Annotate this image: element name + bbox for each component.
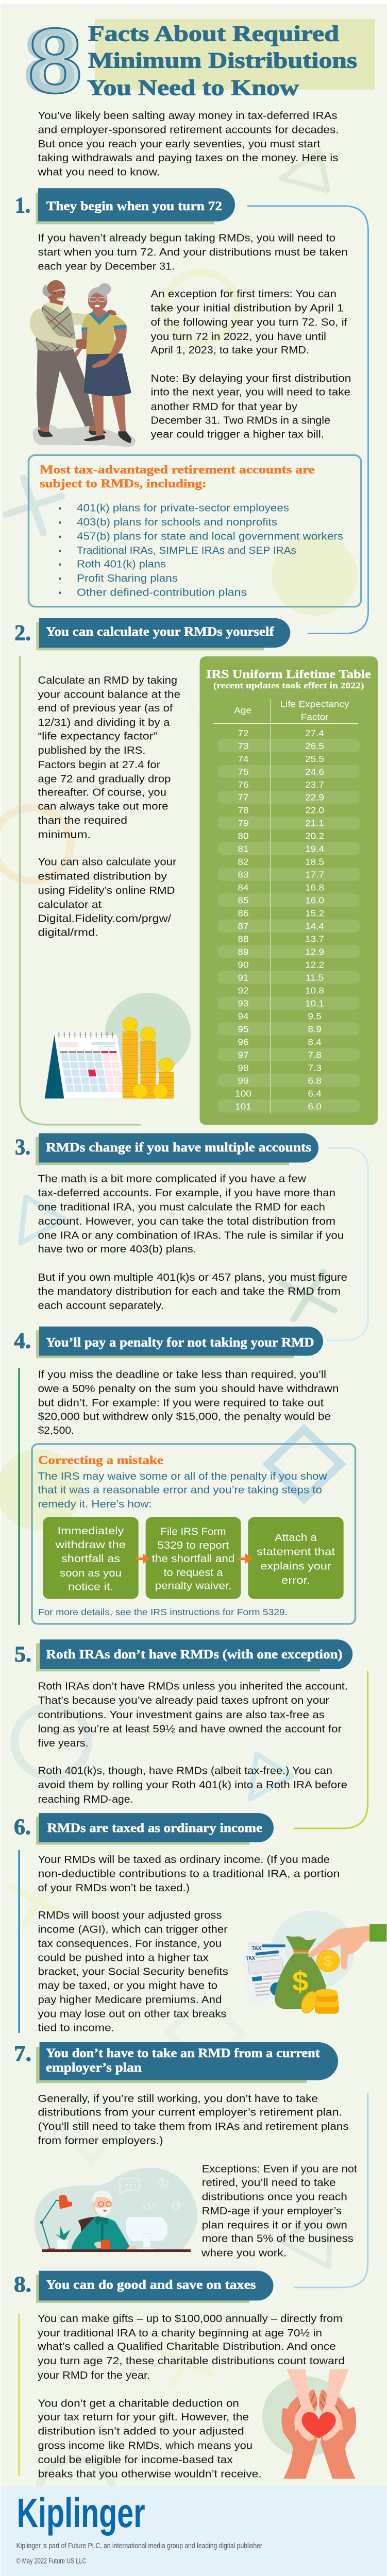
section 4 text: owe a 50% penalty on the sum you should have withdrawn — [38, 1383, 339, 1395]
section 3 text: the mandatory distribution for each and take the RMD from — [38, 1286, 341, 1297]
section 2 text: “life expectancy factor” — [38, 731, 157, 742]
exception text: take your initial distribution by April 1 — [150, 302, 344, 314]
illustration: money bag, tax forms and coins — [242, 1910, 386, 2015]
section 5 text: long as you’re at least 59½ and have owned the account for — [38, 1723, 342, 1735]
table rows: 91 — [238, 972, 249, 982]
table rows: 7.3 — [308, 1062, 322, 1073]
illustration: calendar and coins — [45, 993, 191, 1098]
table rows: 27.4 — [305, 727, 324, 738]
table rows: 15.2 — [305, 908, 324, 918]
table rows: 12.2 — [305, 959, 324, 970]
account list: 457(b) plans for state and local government workers — [77, 531, 343, 542]
table rows: 22.9 — [305, 792, 324, 803]
table rows: 12.9 — [305, 946, 324, 957]
exception text: into the next year, you will need to take — [150, 386, 350, 398]
section 2 text: You can also calculate your — [38, 856, 177, 868]
table rows: 81 — [238, 843, 249, 854]
exception text: December 31. Two RMDs in a single — [150, 415, 330, 426]
footer — [1, 2486, 387, 2576]
exception text: you turn 72 in 2022, you have until — [150, 331, 326, 343]
table rows: 100 — [235, 1088, 251, 1098]
section 5 text: Roth 401(k)s, though, have RMDs (albeit tax-free.) You can — [38, 1765, 332, 1776]
table rows: 18.5 — [305, 856, 324, 867]
section 8 text: distribution isn’t added to your adjusted — [38, 2426, 244, 2437]
title: You Need to Know — [87, 75, 299, 100]
section 6 text: RMDs will boost your adjusted gross — [38, 1910, 222, 1921]
exceptions text: Exceptions: Even if you are not — [202, 2163, 357, 2175]
heading 3: 3. — [15, 1134, 30, 1159]
intro text: and employer-sponsored retirement accounts for decades. — [38, 124, 339, 135]
section 5 text — [38, 1681, 348, 1805]
exception text: of the following year you turn 72. So, if — [150, 317, 347, 328]
section 8 text — [37, 2313, 345, 2480]
section 8 text: gross income like RMDs, which means you — [38, 2440, 253, 2451]
section 2 text: calculator at — [38, 899, 102, 910]
section 4 text: $2,500. — [38, 1425, 74, 1436]
section 7 text — [38, 2093, 349, 2146]
table rows: 96 — [238, 1037, 249, 1047]
title: Facts About Required — [88, 21, 339, 46]
section 2 text: end of previous year (as of — [38, 703, 173, 714]
section 2 text: Digital.Fidelity.com/prgw/ — [38, 913, 171, 924]
section 5 text: contributions. Your investment gains are also tax-free as — [38, 1709, 325, 1721]
illustration: older couple — [29, 280, 136, 447]
table rows: 84 — [238, 882, 249, 893]
table rows: 97 — [238, 1049, 249, 1060]
illustration: money bag, tax forms and coins: $ — [324, 1954, 332, 1970]
section 3 text: But if you own multiple 401(k)s or 457 plans, you must figure — [38, 1272, 347, 1283]
exceptions text: more than 5% of the business — [202, 2233, 354, 2244]
step 3: statement that — [257, 1546, 335, 1557]
illustration: money bag, tax forms and coins: $ — [292, 1965, 308, 1997]
section 7 text: distributions from your current employer’s retirement plan. — [38, 2107, 342, 2118]
exception text: April 1, 2023, to take your RMD. — [150, 345, 309, 356]
table rows: 73 — [238, 740, 249, 751]
section 8 text: you turn age 72, these charitable distributions count toward — [38, 2355, 345, 2367]
section 2 text: minimum. — [38, 829, 91, 840]
section 2 text: thereafter. Of course, you — [38, 787, 166, 798]
heading 6: RMDs are taxed as ordinary income — [47, 1821, 262, 1835]
step 3: error. — [281, 1574, 310, 1586]
intro text — [37, 110, 339, 178]
mistake intro text: remedy it. Here’s how: — [38, 1498, 152, 1510]
publisher line: Kiplinger is part of Future PLC, an international media group and leading digital publisher — [16, 2541, 262, 2550]
table rows: 6.8 — [308, 1075, 322, 1086]
step 1: notice it. — [68, 1581, 113, 1593]
section 6 text: bracket, your Social Security benefits — [38, 1966, 228, 1977]
section 8 text: your traditional IRA to a charity beginning at age 70½ in — [38, 2328, 322, 2339]
exceptions text: RMD-age if your employer’s — [202, 2205, 342, 2217]
arrow: step 1 to step 2 — [135, 1553, 150, 1564]
step 2: penalty waiver. — [155, 1580, 231, 1591]
exceptions text: retired, you’ll need to take — [202, 2177, 336, 2189]
step 2: 5329 to report — [157, 1539, 229, 1551]
section 8 text: your tax return for your gift. However, the — [38, 2412, 249, 2423]
section 1 text: start when you turn 72. And your distributions must be taken — [38, 246, 348, 258]
section 8 text: You don’t get a charitable deduction on — [38, 2398, 239, 2410]
section 2 text: digital/rmd. — [38, 927, 98, 938]
numeral 8: 8 — [23, 9, 77, 113]
title: Minimum Distributions — [88, 48, 357, 73]
heading 7 — [14, 2041, 338, 2083]
table rows: 17.7 — [305, 869, 324, 880]
table rows — [235, 727, 324, 1111]
table rows: 78 — [238, 805, 249, 816]
heading 6 — [14, 1813, 274, 1845]
section 8 text: You can make gifts – up to $100,000 annually – directly from — [38, 2313, 343, 2325]
section 6 text: tax consequences. For instance, you — [38, 1938, 222, 1950]
section 6 text: could be pushed into a higher tax — [38, 1952, 209, 1963]
intro text: what you need to know. — [37, 166, 160, 178]
section 2 text: Calculate an RMD by taking — [38, 675, 177, 686]
table rows: 89 — [238, 946, 249, 957]
panel: correcting a mistake: Correcting a mistake — [38, 1453, 163, 1467]
heading 7: employer’s plan — [46, 2060, 142, 2075]
section 5 text: avoid them by rolling your Roth 401(k) into a Roth IRA before — [38, 1779, 347, 1791]
panel: IRS uniform lifetime table: IRS Uniform Lifetime Table — [206, 668, 371, 681]
step 1: shortfall as — [61, 1553, 120, 1565]
section 5 text: That’s because you’ve already paid taxes upfront on your — [38, 1695, 329, 1706]
step 1: withdraw the — [55, 1539, 126, 1551]
step 2: to request a — [163, 1567, 223, 1579]
exceptions text: plan requires it or if you own — [202, 2219, 347, 2231]
account list: Other defined-contribution plans — [77, 587, 247, 598]
table rows: 20.2 — [305, 831, 324, 841]
section 1 text — [38, 232, 348, 272]
section 3 text: The math is a bit more complicated if you have a few — [38, 1173, 306, 1185]
table rows: 8.4 — [308, 1037, 322, 1047]
table rows: 98 — [238, 1062, 249, 1073]
account list: 403(b) plans for schools and nonprofits — [77, 517, 277, 528]
exceptions text: where you work. — [201, 2247, 287, 2259]
section 3 text: tax-deferred accounts. For example, if you have more than — [38, 1188, 335, 1199]
step 2: File IRS Form — [161, 1526, 226, 1538]
heading 1 — [15, 188, 235, 224]
Kiplinger logo: Kiplinger — [17, 2490, 145, 2536]
numeral 8: 8 — [28, 9, 82, 113]
table rows: 16.0 — [305, 895, 324, 905]
exception text — [150, 289, 351, 440]
panel: account types — [29, 455, 361, 607]
table rows: 10.1 — [305, 998, 324, 1008]
illustration: older man at desk — [35, 2168, 197, 2252]
heading 6: 6. — [14, 1814, 31, 1839]
section 8 text: breaks that you otherwise wouldn’t receive. — [38, 2468, 262, 2480]
section 4 text: If you miss the deadline or take less than required, you’ll — [38, 1369, 326, 1380]
section 6 text: non-deductible contributions to a traditional IRA, a portion — [38, 1868, 340, 1879]
section 6 text: you may lose out on other tax breaks — [38, 2008, 227, 2020]
heading 1: 1. — [15, 193, 30, 217]
panel: correcting a mistake — [32, 1444, 356, 1624]
table header: Factor — [301, 711, 329, 722]
table header — [234, 699, 349, 722]
intro text: taking withdrawals and paying taxes on the money. Here is — [38, 152, 338, 164]
section 4 text: $20,000 but withdrew only $15,000, the penalty would be — [38, 1411, 331, 1422]
heading 7: 7. — [14, 2041, 31, 2066]
table rows: 21.1 — [305, 818, 324, 828]
heading 4 — [14, 1327, 323, 1358]
mistake intro text: that it was a reasonable error and you’re taking steps to — [38, 1484, 322, 1496]
table rows: 93 — [238, 998, 249, 1008]
table rows: 95 — [238, 1024, 249, 1034]
table rows: 19.4 — [305, 843, 324, 854]
arrow: step 2 to step 3 — [238, 1553, 253, 1564]
section 2 text: using Fidelity’s online RMD — [38, 885, 175, 896]
table rows: 8.9 — [308, 1024, 322, 1034]
section 3 text: one IRA or any combination of IRAs. The rule is similar if you — [38, 1230, 344, 1241]
table rows: 88 — [238, 934, 249, 944]
heading 5: 5. — [14, 1641, 31, 1667]
section 2 text: your account balance at the — [38, 689, 180, 701]
section 8 text: could be eligible for income-based tax — [38, 2454, 233, 2466]
table rows: 82 — [238, 856, 249, 867]
table rows: 7.8 — [308, 1049, 322, 1060]
section 3 text: have two or more 403(b) plans. — [38, 1243, 196, 1255]
table header: Life Expectancy — [280, 699, 349, 709]
table rows: 25.5 — [305, 753, 324, 764]
account list: 401(k) plans for private-sector employees — [77, 502, 289, 514]
table rows: 90 — [238, 959, 249, 970]
heading 4: You’ll pay a penalty for not taking your RMD — [46, 1335, 314, 1349]
panel: IRS uniform lifetime table: (recent updates took effect in 2022) — [213, 681, 364, 690]
table rows: 77 — [238, 792, 249, 803]
section 2 text: than the required — [38, 815, 127, 826]
account list — [59, 502, 343, 598]
section 5 text: reaching RMD-age. — [38, 1793, 133, 1805]
table stripes — [217, 739, 360, 1112]
section 8 text: your RMD for the year. — [38, 2369, 150, 2381]
table rows: 24.6 — [305, 766, 324, 777]
table rows: 23.7 — [305, 779, 324, 790]
heading 5: Roth IRAs don’t have RMDs (with one exception) — [46, 1647, 343, 1662]
intro text: But once you reach your early seventies, you must start — [38, 138, 321, 150]
section 3 text: one traditional IRA, you must calculate the RMD for each — [38, 1201, 325, 1213]
section 7 text: Generally, if you’re still working, you don’t have to take — [38, 2093, 318, 2105]
table rows: 87 — [238, 921, 249, 931]
section 6 text: may be taxed, or you might have to — [38, 1980, 217, 1992]
table rows: 72 — [238, 727, 249, 738]
table rows: 83 — [238, 869, 249, 880]
section 1 text: each year by December 31. — [38, 261, 175, 272]
section 2 text: estimated distribution by — [38, 871, 167, 882]
section 5 text: Roth IRAs don’t have RMDs unless you inherited the account. — [38, 1681, 348, 1692]
section 6 text: pay higher Medicare premiums. And — [38, 1994, 222, 2006]
panel: IRS uniform lifetime table — [200, 656, 378, 1125]
section 7 text: (You’ll still need to take them from IRAs and retirement plans — [38, 2121, 349, 2132]
heading 3 — [15, 1133, 318, 1165]
table rows: 94 — [238, 1011, 249, 1021]
heading 4: 4. — [14, 1328, 31, 1353]
section 2 text: age 72 and gradually drop — [38, 773, 171, 785]
section 6 text — [38, 1854, 340, 2033]
copyright: © May 2022 Future US LLC — [16, 2557, 87, 2565]
table rows: 6.0 — [308, 1101, 322, 1111]
table rows: 92 — [238, 985, 249, 995]
table rows: 99 — [238, 1075, 249, 1086]
step 2: the shortfall and — [152, 1553, 234, 1565]
illustration: money bag, tax forms and coins: TAX — [245, 1955, 256, 1962]
section 7 text: from former employers.) — [38, 2135, 163, 2146]
heading 2: 2. — [14, 620, 31, 645]
section 5 text: five years. — [38, 1738, 88, 1749]
section 2 text: 12/31) and dividing it by a — [38, 717, 170, 728]
step 2 — [146, 1517, 241, 1599]
heading 8: 8. — [14, 2272, 31, 2297]
account list: Profit Sharing plans — [77, 572, 178, 584]
table rows: 11.5 — [306, 972, 324, 982]
mistake intro text: The IRS may waive some or all of the penalty if you show — [38, 1470, 327, 1482]
heading 3: RMDs change if you have multiple accounts — [46, 1140, 311, 1155]
heading 2 — [14, 618, 290, 650]
table rows: 75 — [238, 766, 249, 777]
exceptions text: distributions once you reach — [202, 2191, 347, 2202]
step 3: explains your — [260, 1561, 331, 1572]
exception text: An exception for first timers: You can — [150, 289, 336, 300]
heading 8 — [14, 2271, 273, 2303]
section 4 text: but didn’t. For example: If you were required to take out — [38, 1397, 324, 1409]
exception text: another RMD for that year by — [150, 401, 298, 413]
title — [23, 9, 357, 113]
table rows: 74 — [238, 753, 249, 764]
table rows: 6.4 — [308, 1088, 322, 1098]
table header: Age — [234, 705, 251, 715]
section 2 text: published by the IRS. — [38, 744, 145, 756]
section 3 text — [38, 1173, 347, 1312]
table rows: 10.8 — [305, 985, 324, 995]
table rows: 26.5 — [305, 740, 324, 751]
section 2 text — [38, 675, 180, 938]
table rows: 14.4 — [305, 921, 324, 931]
step 1 — [43, 1517, 139, 1599]
panel: account types: Most tax-advantaged retirement accounts are — [40, 463, 315, 477]
table rows: 80 — [238, 831, 249, 841]
section 6 text: of your RMDs won’t be taxed.) — [38, 1883, 190, 1894]
exception text: Note: By delaying your first distribution — [150, 372, 351, 384]
table rows: 76 — [238, 779, 249, 790]
section 3 text: account. However, you can take the total distribution from — [38, 1215, 335, 1227]
section 1 text: If you haven’t already begun taking RMDs, you will need to — [38, 232, 335, 244]
intro text: You’ve likely been salting away money in tax-deferred IRAs — [38, 110, 337, 122]
mistake intro text — [38, 1470, 327, 1510]
table rows: 22.0 — [305, 805, 324, 816]
section 6 text: tied to income. — [38, 2022, 114, 2033]
step 1: soon as you — [60, 1567, 122, 1579]
table rows: 9.5 — [308, 1011, 322, 1021]
table rows: 101 — [235, 1101, 251, 1111]
section 6 text: income (AGI), which can trigger other — [38, 1924, 228, 1935]
heading 2: You can calculate your RMDs yourself — [46, 624, 274, 639]
heading 8: You can do good and save on taxes — [46, 2277, 256, 2292]
section 2 text: can always take out more — [38, 801, 168, 812]
table rows: 79 — [238, 818, 249, 828]
heading 5 — [14, 1639, 352, 1671]
table rows: 85 — [238, 895, 249, 905]
details note: For more details, see the IRS instructions for Form 5329. — [38, 1607, 288, 1617]
section 6 text: Your RMDs will be taxed as ordinary income. (If you made — [38, 1854, 330, 1866]
heading 1: They begin when you turn 72 — [46, 198, 222, 213]
exception text: year could trigger a higher tax bill. — [150, 429, 324, 440]
step 3: Attach a — [275, 1532, 317, 1544]
step 1: Immediately — [58, 1525, 124, 1537]
exceptions text — [201, 2163, 357, 2259]
table rows: 86 — [238, 908, 249, 918]
table rows: 13.7 — [305, 934, 324, 944]
section 2 text: Factors begin at 27.4 for — [38, 759, 160, 771]
account list: Roth 401(k) plans — [77, 558, 166, 570]
panel: account types: subject to RMDs, including: — [40, 477, 207, 490]
illustration: money bag, tax forms and coins: TAX — [252, 1945, 261, 1952]
section 4 text — [38, 1369, 339, 1436]
step 3 — [248, 1517, 344, 1599]
table rows: 16.8 — [305, 882, 324, 893]
section 8 text: what’s called a Qualified Charitable Distribution. And once — [37, 2341, 336, 2352]
account list: Traditional IRAs, SIMPLE IRAs and SEP IRAs — [77, 545, 296, 556]
heading 7: You don’t have to take an RMD from a current — [46, 2046, 320, 2060]
illustration: hands holding heart — [262, 2369, 356, 2479]
section 3 text: each account separately. — [38, 1300, 164, 1312]
